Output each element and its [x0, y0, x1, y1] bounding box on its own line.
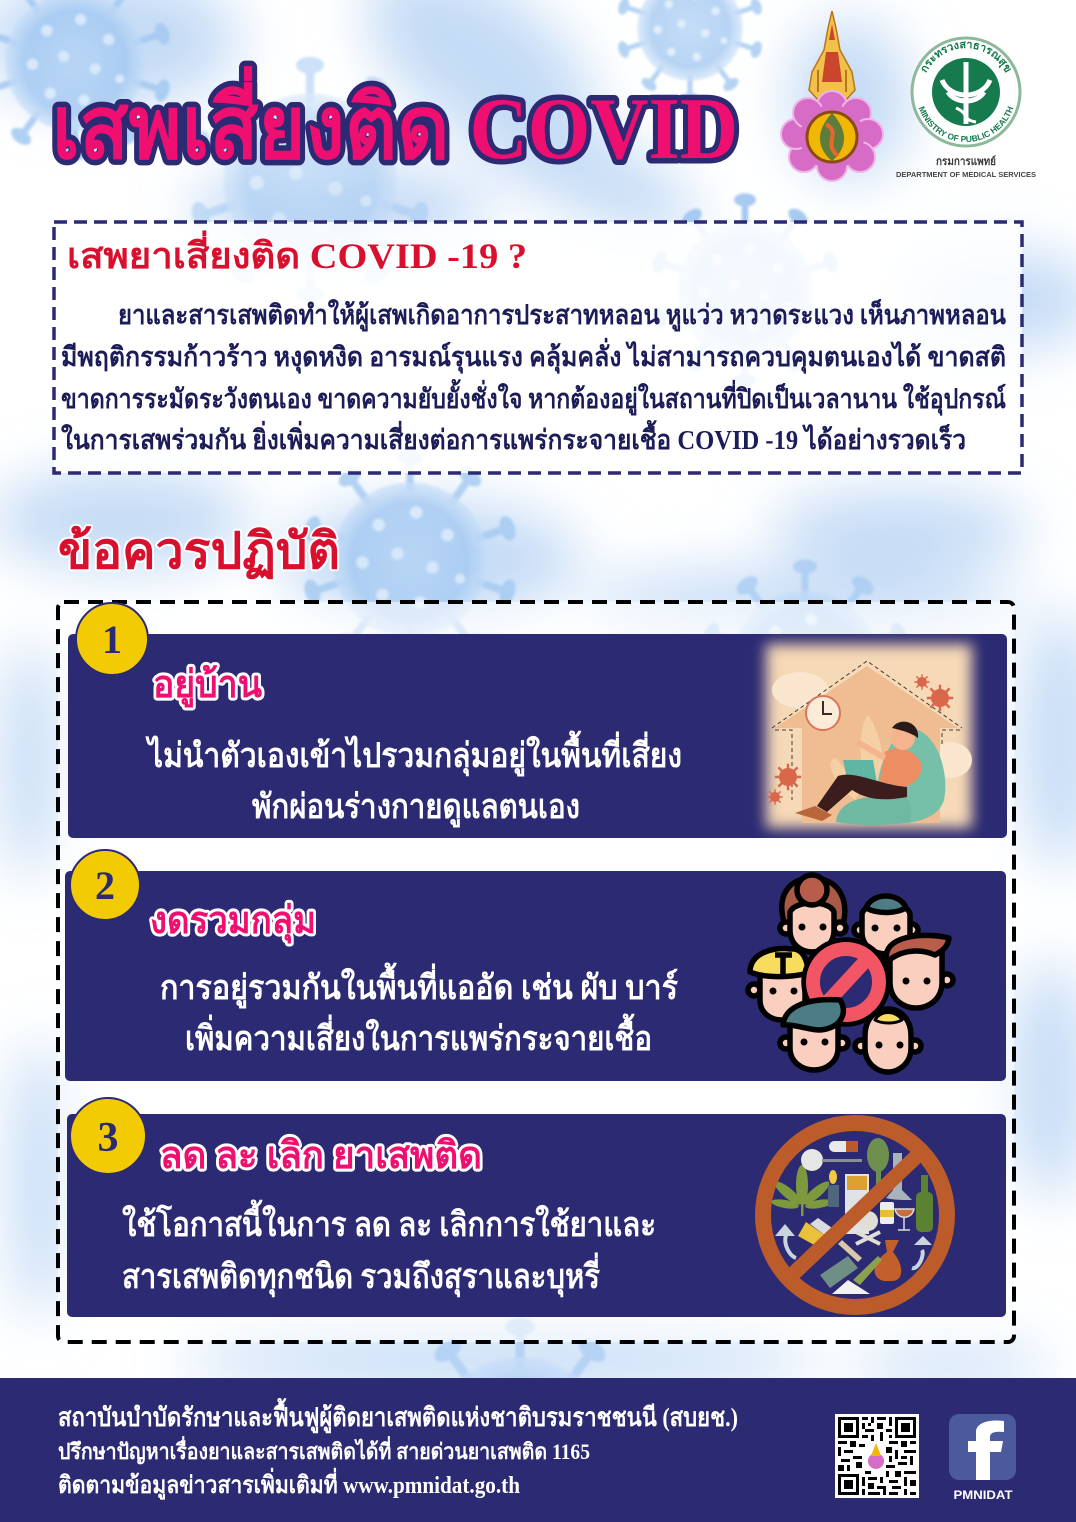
step 3 number badge: 3 [98, 1115, 118, 1161]
icon: facebook: PMNIDAT [954, 1488, 1013, 1502]
panel: step 1 stay home [68, 603, 1007, 838]
icon: crowd with prohibition sign [748, 875, 953, 1072]
illustration: man relaxing at home [766, 644, 972, 828]
section heading: ข้อควรปฏิบัติ [58, 523, 340, 579]
logo: ministry of public health [896, 36, 1036, 179]
panel: step 2 avoid gatherings [65, 850, 1006, 1081]
intro paragraph: ในการเสพร่วมกัน ยิ่งเพิ่มความเสี่ยงต่อการแพร่กระจายเชื้อ COVID -19 ได้อย่างรวดเร็ว [61, 419, 966, 455]
logo: ministry of public health: กระทรวงสาธารณสุข [922, 41, 1012, 73]
intro paragraph [61, 297, 1006, 455]
step 2 description [160, 962, 679, 1058]
icon: prohibited drugs [763, 1123, 947, 1307]
step 1 number badge [76, 603, 148, 675]
step 3 number badge [70, 1098, 146, 1174]
title: เสพเสี่ยงติด COVID [52, 66, 738, 178]
logo: ministry of public health: DEPARTMENT OF MEDICAL SERVICES [896, 172, 1036, 179]
logo: ministry of public health: MINISTRY OF PUBLIC HEALTH [918, 106, 1014, 142]
step 1 description: พักผ่อนร่างกายดูแลตนเอง [252, 789, 580, 828]
intro paragraph: มีพฤติกรรมก้าวร้าว หงุดหงิด อารมณ์รุนแรง คลุ้มคลั่ง ไม่สามารถควบคุมตนเองได้ ขาดสติ [61, 337, 1006, 374]
step 1 description: ไม่นำตัวเองเข้าไปรวมกลุ่มอยู่ในพื้นที่เสี่ยง [145, 730, 682, 777]
footer organisation name: สถาบันบำบัดรักษาและฟื้นฟูผู้ติดยาเสพติดแห่งชาติบรมราชชนนี (สบยช.) [58, 1397, 738, 1434]
step 3 description: ใช้โอกาสนี้ในการ ลด ละ เลิกการใช้ยาและ [122, 1199, 656, 1244]
dashed frame around steps [58, 602, 1014, 1342]
footer band [0, 1378, 1076, 1522]
step 2 number badge [70, 850, 140, 920]
step 1 description [145, 730, 682, 828]
footer website: ติดตามข้อมูลข่าวสารเพิ่มเติมที่ www.pmnidat.go.th [58, 1467, 520, 1500]
step 2 description: การอยู่รวมกันในพื้นที่แออัด เช่น ผับ บาร์ [160, 962, 679, 1009]
panel: step 3 quit drugs [67, 1098, 1006, 1317]
step 1 heading: อยู่บ้าน [153, 664, 262, 708]
step 2 heading: งดรวมกลุ่ม [150, 900, 316, 944]
step 2 description: เพิ่มความเสี่ยงในการแพร่กระจายเชื้อ [185, 1013, 652, 1058]
logo: institute emblem [781, 11, 883, 181]
step 2 number badge: 2 [95, 863, 115, 908]
logo: ministry of public health: กรมการแพทย์ [936, 155, 996, 168]
step 3 description [122, 1199, 656, 1298]
intro heading: เสพยาเสี่ยงติด COVID -19 ? [67, 230, 527, 276]
panel: intro text box [54, 222, 1022, 473]
step 3 heading: ลด ละ เลิก ยาเสพติด [160, 1135, 482, 1177]
icon: facebook [949, 1414, 1016, 1502]
footer hotline: ปรึกษาปัญหาเรื่องยาและสารเสพติดได้ที่ สายด่วนยาเสพติด 1165 [58, 1435, 590, 1465]
QR code [835, 1414, 919, 1498]
step 3 description: สารเสพติดทุกชนิด รวมถึงสุราและบุหรี่ [122, 1252, 601, 1298]
step 1 number badge: 1 [102, 617, 122, 662]
